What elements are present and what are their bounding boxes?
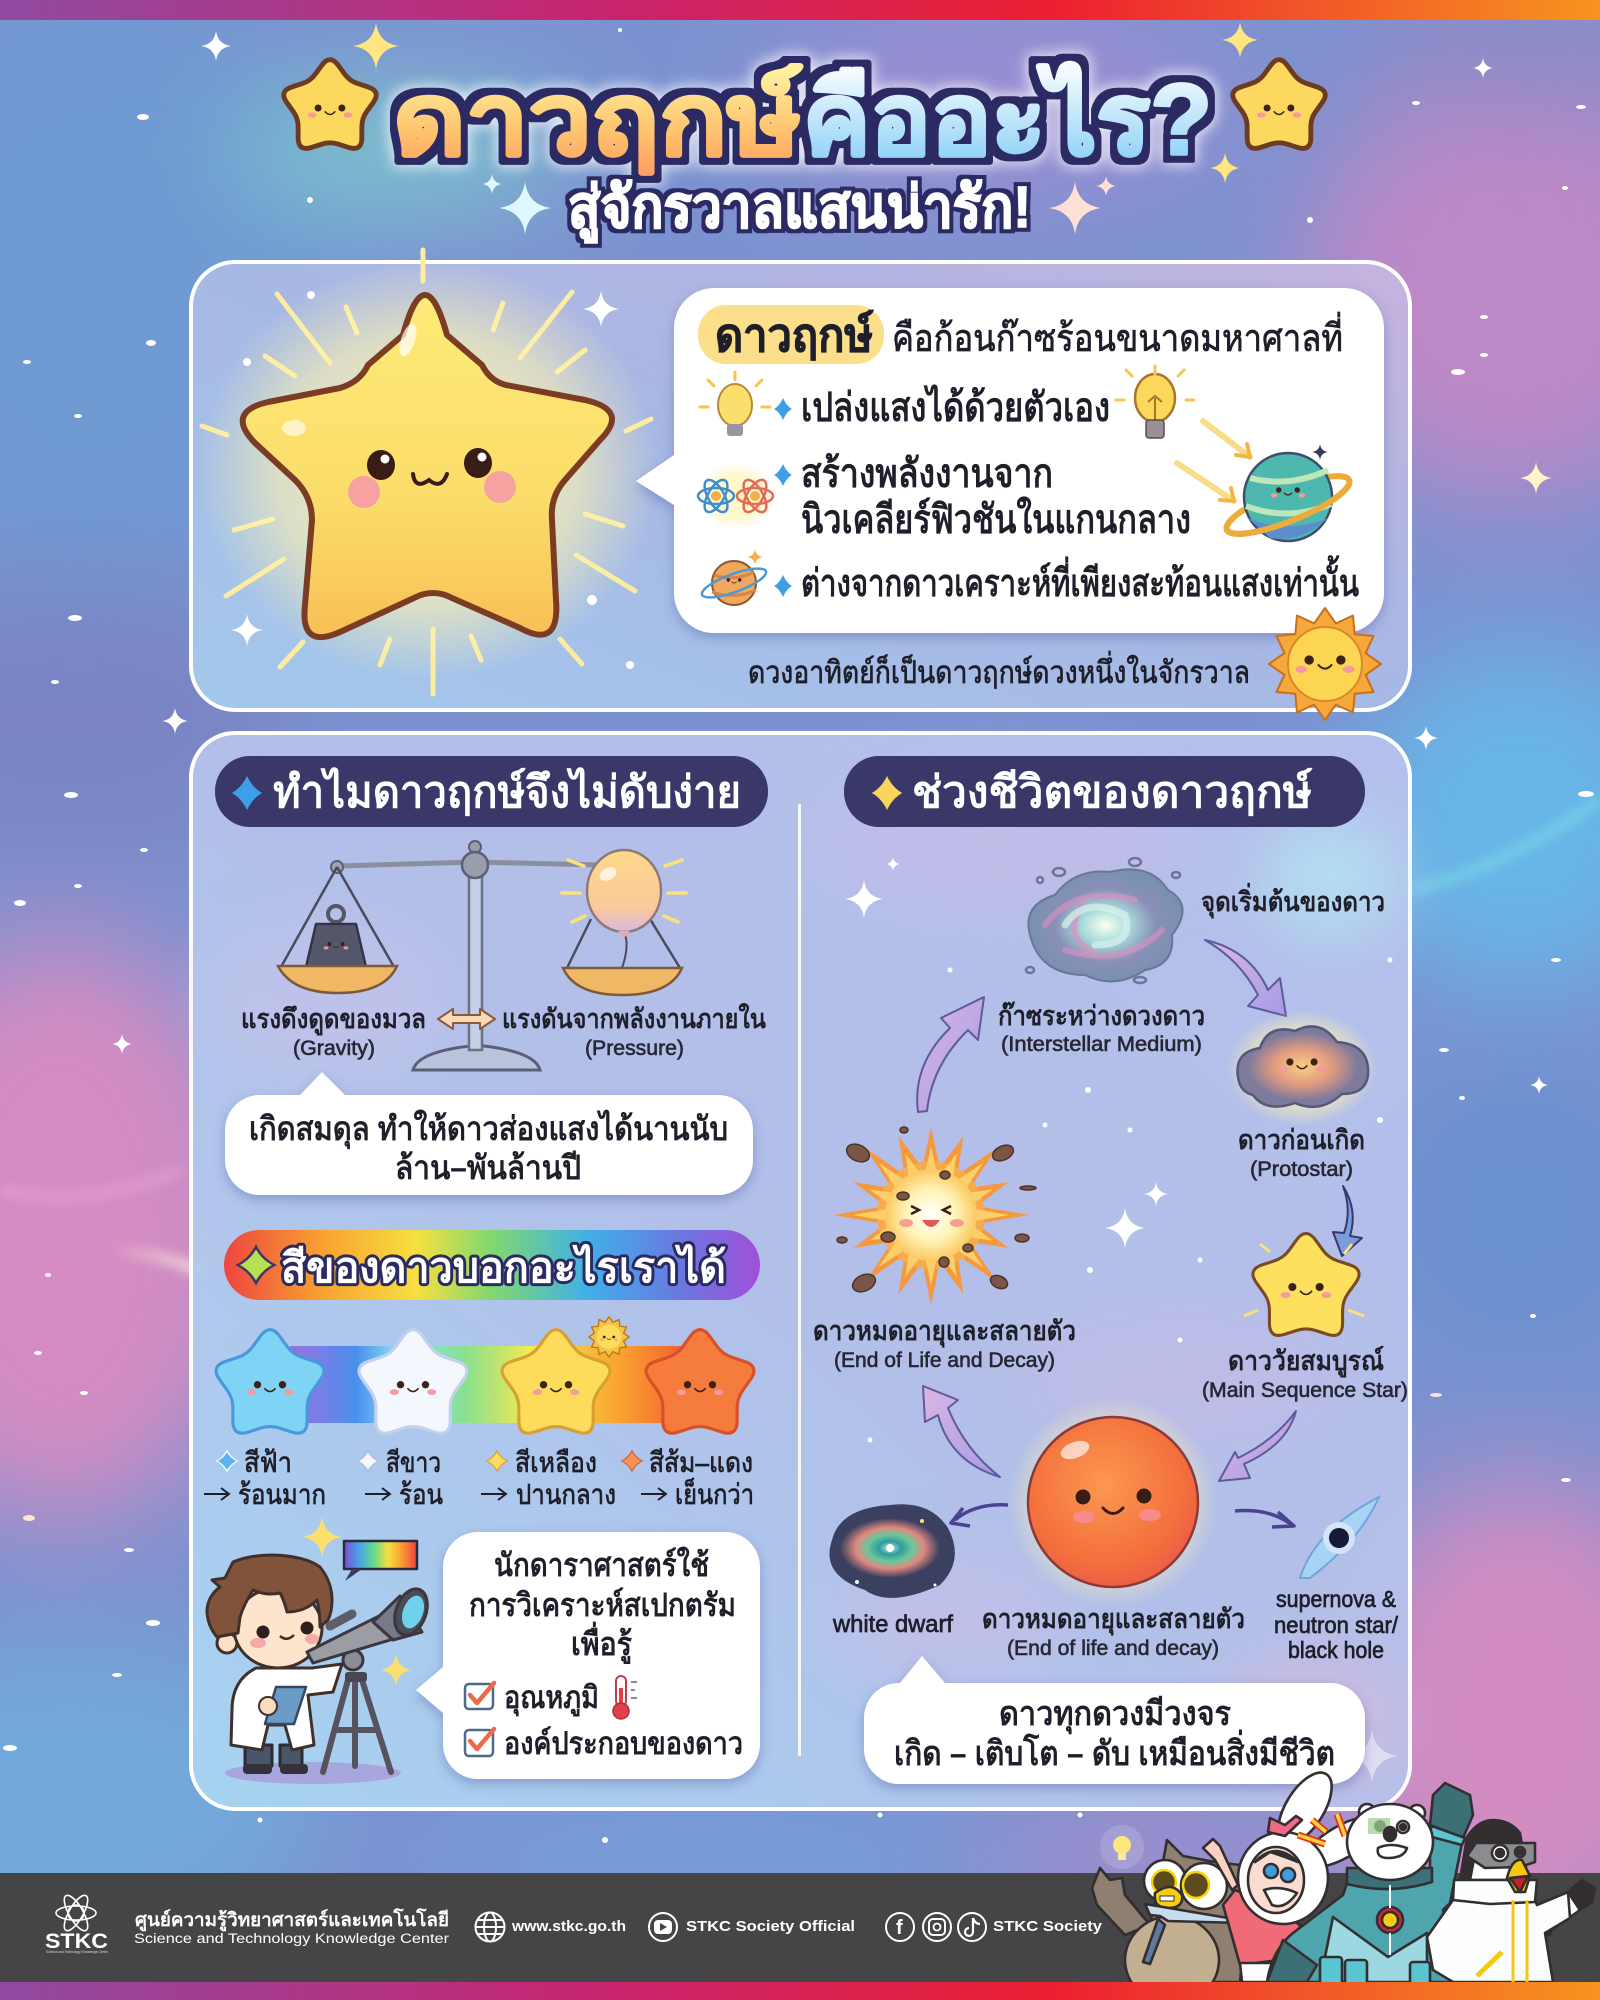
owl mascot — [1090, 1838, 1240, 1982]
icon: yellow star — [502, 1330, 610, 1433]
arrow: balance double arrow — [438, 1009, 495, 1029]
arrow: medium to protostar — [1205, 940, 1286, 1016]
label: white dwarf: white dwarf — [832, 1611, 953, 1638]
bullet: differs from planets: ต่างจากดาวเคราะห์ที่เพียงสะท้อนแสงเท่านั้น — [801, 555, 1359, 605]
callout: spectrum analysis: การวิเคราะห์สเปกตรัม — [469, 1587, 736, 1623]
label: pressure: แรงดันจากพลังงานภายใน — [502, 1003, 766, 1034]
label: blue hottest: สีฟ้า — [244, 1447, 292, 1478]
social icons — [886, 1913, 1103, 1941]
balance scale illustration — [278, 841, 686, 1070]
label: interstellar medium: (Interstellar Medium) — [1001, 1033, 1202, 1056]
mascots group — [1090, 1771, 1596, 1982]
label: yellow medium: สีเหลือง — [515, 1447, 597, 1478]
stage: interstellar medium nebula — [1026, 858, 1183, 983]
icon: blue star — [216, 1330, 324, 1433]
callout: spectrum analysis: นักดาราศาสตร์ใช้ — [494, 1546, 709, 1583]
social icons: STKC Society — [993, 1918, 1103, 1935]
youtube: STKC Society Official — [686, 1918, 855, 1935]
check item: temperature: อุณหภูมิ — [504, 1680, 599, 1717]
label: pressure: (Pressure) — [585, 1037, 684, 1060]
bullet: nuclear fusion — [774, 452, 1191, 542]
callout: spectrum analysis — [416, 1532, 760, 1779]
label: end of life and decay: (End of Life and Decay) — [834, 1349, 1055, 1372]
stage: explosion — [833, 1127, 1036, 1305]
arrow: main sequence to red giant — [1219, 1411, 1296, 1481]
heading: star life cycle: ช่วงชีวิตของดาวฤกษ์ — [912, 767, 1313, 817]
label: red giant stage: ดาวหมดอายุและสลายตัว — [982, 1604, 1245, 1636]
label: supernova and remnants — [1274, 1586, 1399, 1663]
arrow: giant to black hole — [1235, 1511, 1294, 1527]
label: red giant stage — [982, 1604, 1245, 1660]
label: protostar — [1238, 1125, 1365, 1181]
panel tint blobs — [210, 770, 1400, 1770]
organisation name: ศูนย์ความรู้วิทยาศาสตร์และเทคโนโลยี — [135, 1908, 449, 1932]
bullet: nuclear fusion: สร้างพลังงานจาก — [801, 452, 1053, 496]
social icons: f — [896, 1917, 903, 1939]
balloon — [562, 850, 686, 938]
label: protostar: (Protostar) — [1250, 1158, 1353, 1181]
label: end of life and decay: ดาวหมดอายุและสลายตัว — [813, 1316, 1076, 1348]
arrow: giant to white dwarf — [951, 1505, 1008, 1526]
definition line: คือก้อนก๊าซร้อนขนาดมหาศาลที่ — [892, 312, 1343, 360]
column divider line — [798, 804, 801, 1756]
stage: red giant — [1008, 1397, 1218, 1607]
arrow: giant to explosion — [923, 1386, 1000, 1477]
label: supernova and remnants: supernova & — [1276, 1586, 1396, 1612]
label: orange-red cooler: สีส้ม–แดง — [649, 1447, 753, 1478]
label: blue hottest — [204, 1447, 326, 1510]
heading: why stars do not go out — [215, 756, 768, 827]
stage: white dwarf nebula — [829, 1504, 955, 1598]
lab coat — [231, 1664, 342, 1750]
heading: star colours — [224, 1230, 760, 1300]
organisation name: Science and Technology Knowledge Center — [134, 1931, 450, 1946]
label: white hot: สีขาว — [386, 1447, 441, 1478]
icon: light bulb left — [700, 372, 770, 436]
callout: life cycle: เกิด – เติบโต – ดับ เหมือนสิ่งมีชีวิต — [894, 1729, 1335, 1773]
organisation name — [134, 1908, 450, 1946]
label: orange-red cooler: เย็นกว่า — [675, 1477, 754, 1510]
callout: balance — [225, 1072, 753, 1195]
label: white hot — [358, 1447, 443, 1510]
speech bubble: definition — [636, 288, 1384, 633]
website — [476, 1912, 626, 1942]
icon: hero star with face — [243, 295, 612, 637]
check item: temperature — [465, 1680, 599, 1717]
callout: balance: ล้าน–พันล้านปี — [395, 1149, 581, 1186]
title block — [201, 22, 1325, 243]
label: pressure — [502, 1003, 766, 1060]
weight — [306, 906, 366, 967]
icon: right title star — [1233, 60, 1325, 148]
label: supernova and remnants: neutron star/ — [1274, 1612, 1399, 1638]
logo: STKC: Science and Technology Knowledge Center — [46, 1949, 109, 1954]
penguin mascot — [1427, 1820, 1595, 1982]
label: start of a star: จุดเริ่มต้นของดาว — [1201, 882, 1385, 919]
arrows: light reaching planet — [1177, 421, 1250, 501]
label: red giant stage: (End of life and decay) — [1007, 1637, 1219, 1660]
icon: light bulb right — [1116, 366, 1194, 438]
callout: life cycle — [864, 1656, 1365, 1784]
logo: STKC — [45, 1892, 109, 1954]
label: yellow medium — [481, 1447, 616, 1510]
column sparkles — [845, 857, 1398, 1782]
clipboard — [265, 1687, 306, 1724]
icon: thermometer — [613, 1676, 637, 1719]
bulb by mascots — [1100, 1825, 1144, 1869]
light rays around hero star — [202, 250, 651, 694]
tripod — [323, 1680, 391, 1772]
bottom gradient bar — [0, 1982, 1600, 2000]
icon: smiling sun — [1269, 608, 1381, 720]
decorative title sparkles — [201, 22, 1258, 234]
label: gravity — [241, 1004, 426, 1060]
label: protostar: ดาวก่อนเกิด — [1238, 1125, 1365, 1155]
icon: orange star — [646, 1330, 754, 1433]
stage: main sequence star — [1244, 1233, 1364, 1335]
icon: ringed planet — [1221, 444, 1355, 545]
main title: ดาวฤกษ์ — [393, 64, 803, 176]
heading: star life cycle — [844, 756, 1365, 827]
youtube — [649, 1913, 855, 1941]
arrow: explosion to medium — [917, 997, 984, 1112]
label: interstellar medium — [998, 1001, 1205, 1056]
callout: spectrum analysis: เพื่อรู้ — [571, 1621, 632, 1665]
label: blue hottest: ร้อนมาก — [238, 1479, 326, 1510]
hero star glow — [198, 260, 658, 680]
label: supernova and remnants: black hole — [1288, 1637, 1384, 1663]
bullet: shines by itself: เปล่งแสงได้ด้วยตัวเอง — [801, 384, 1110, 430]
heading: why stars do not go out: ทำไมดาวฤกษ์จึงไม่ดับง่าย — [273, 766, 741, 817]
rabbit mascot — [1202, 1771, 1356, 1982]
icon: small sun on yellow star — [589, 1317, 629, 1357]
label: gravity: แรงดึงดูดของมวล — [241, 1004, 426, 1036]
label: interstellar medium: ก๊าซระหว่างดวงดาว — [998, 1001, 1205, 1031]
top gradient bar — [0, 0, 1600, 20]
caption: sun is a star: ดวงอาทิตย์ก็เป็นดาวฤกษ์ดวงหนึ่งในจักรวาล — [748, 651, 1250, 690]
label: end of life and decay — [813, 1316, 1076, 1372]
footer band — [0, 1771, 1600, 1982]
illustration: astronomer with telescope — [207, 1517, 433, 1784]
check item: composition: องค์ประกอบของดาว — [504, 1726, 743, 1761]
label: white hot: ร้อน — [399, 1479, 443, 1510]
bear mascot — [1267, 1783, 1473, 1984]
website: www.stkc.go.th — [511, 1918, 626, 1935]
subtitle: สู่จักรวาลแสนน่ารัก! — [568, 175, 1031, 243]
icon: white star — [359, 1330, 467, 1433]
callout: balance: เกิดสมดุล ทำให้ดาวส่องแสงได้นานนับ — [249, 1109, 728, 1150]
label: orange-red cooler — [622, 1447, 754, 1510]
telescope — [330, 1614, 352, 1626]
bullet: nuclear fusion: นิวเคลียร์ฟิวชันในแกนกลาง — [801, 496, 1191, 542]
legs and shoes — [245, 1745, 302, 1766]
bullet: differs from planets — [774, 555, 1359, 605]
logo: STKC: STKC — [45, 1930, 108, 1953]
icon: left title star — [284, 60, 376, 148]
hero sparkles — [231, 291, 634, 669]
head — [217, 1633, 237, 1653]
label: gravity: (Gravity) — [293, 1037, 375, 1060]
label: main sequence star: ดาววัยสมบูรณ์ — [1228, 1345, 1384, 1378]
icon: atoms — [698, 462, 775, 530]
callout: life cycle: ดาวทุกดวงมีวงจร — [999, 1695, 1232, 1735]
label: main sequence star: (Main Sequence Star) — [1202, 1379, 1408, 1402]
arrow: protostar to main sequence — [1333, 1186, 1362, 1256]
label: main sequence star — [1202, 1345, 1408, 1402]
panel: main content — [191, 733, 1410, 1809]
rainbow temperature band — [290, 1346, 706, 1423]
streaks — [0, 800, 1600, 1276]
heading: star colours: สีของดาวบอกอะไรเราได้ — [281, 1243, 726, 1291]
stage: black hole — [1300, 1497, 1379, 1578]
highlighted word: ดาวฤกษ์ — [715, 309, 874, 361]
spectrum speech box — [344, 1541, 417, 1581]
icon: small planet — [699, 549, 769, 605]
panel: what is a star — [191, 250, 1410, 720]
main title — [393, 63, 1212, 176]
stage: protostar cloud — [1226, 1010, 1378, 1126]
label: yellow medium: ปานกลาง — [516, 1479, 616, 1510]
main title: คืออะไร? — [803, 63, 1212, 176]
